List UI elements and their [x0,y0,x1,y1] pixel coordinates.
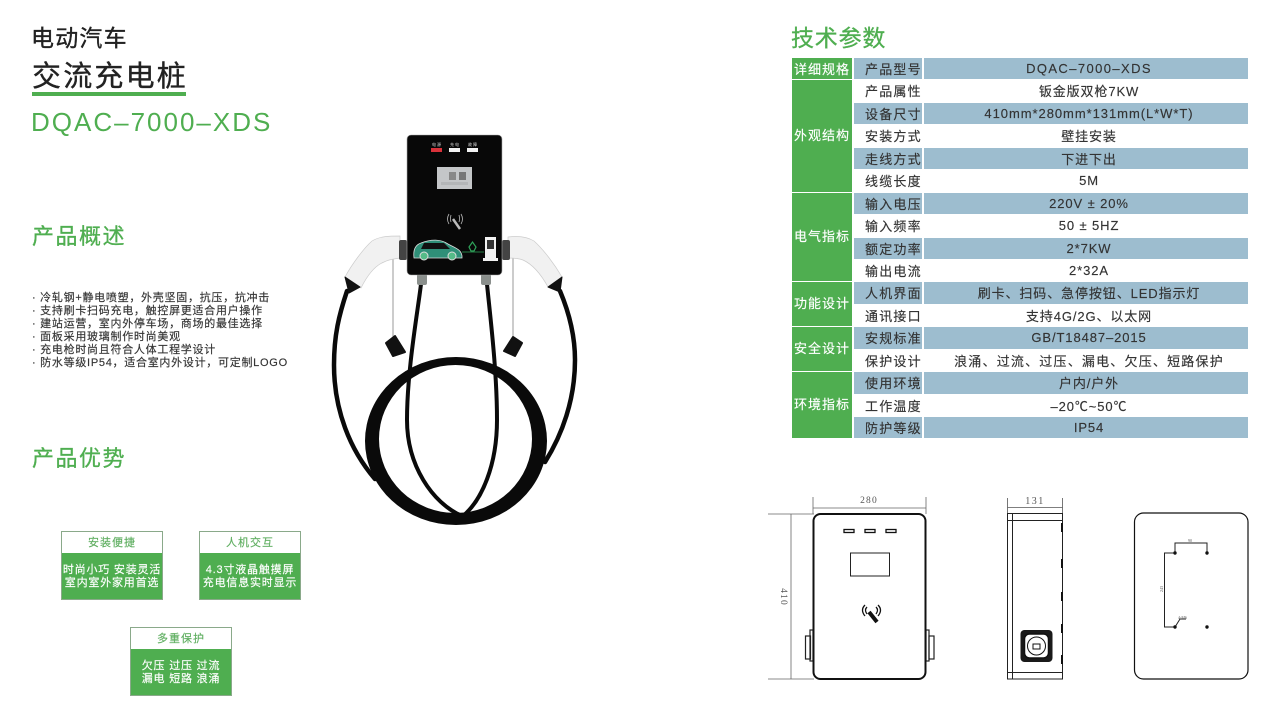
charger body [407,135,502,275]
front view drawing [768,496,935,680]
row: protection [865,354,1224,368]
screen outline [850,553,890,576]
connector socket [1020,630,1052,662]
specification table: 2*7KW [1067,240,1111,256]
row: attribute [865,84,1139,99]
category: function [792,282,852,326]
row: interface [865,308,1152,324]
row: output current [865,262,1109,278]
dimension: 131: 131 [1025,496,1045,507]
category: appearance [792,80,852,192]
charging guns [345,236,562,293]
category: electrical [792,193,852,281]
category: environment: 环境指标 [794,396,850,412]
category: electrical: 电气指标 [794,228,850,244]
car illustration [414,240,462,260]
indicator lights: 故 障 [468,141,477,147]
specification table: 产品属性 [865,84,922,99]
specification table: 壁挂安装 [1061,129,1117,144]
cables [334,284,575,516]
specification table: 使用环境 [865,376,922,391]
specification table: 走线方式 [865,152,922,166]
product overview list: · 冷轧钢+静电喷塑，外壳坚固，抗压，抗冲击 [32,292,270,304]
specification table: DQAC–7000–XDS [1026,60,1152,76]
charging station illustration [483,237,498,261]
specification table: 220V ± 20% [1049,196,1129,210]
specification table: 额定功率 [865,242,922,256]
specification table: 2*32A [1069,262,1109,278]
category: function: 功能设计 [794,296,850,310]
heading: product overview: 产品概述 [32,224,126,249]
specification table: 浪涌、过流、过压、漏电、欠压、短路保护 [954,354,1224,368]
card: human-machine interaction: 充电信息实时显示 [203,577,297,589]
category: environment [792,372,852,438]
row: cable length [865,173,1099,189]
specification table: 输出电流 [865,264,922,278]
card: easy installation: 安装便捷 [88,537,136,549]
specification table: 通讯接口 [865,308,922,324]
row: input voltage [854,193,1248,214]
side outline [1008,514,1062,679]
row: size [854,103,1248,124]
row: HMI [854,282,1248,304]
row: model [854,58,1248,79]
specification table: 安装方式 [865,129,922,144]
specification table: –20℃~50℃ [1051,398,1127,414]
specification table: 输入频率 [865,219,922,234]
specification table: 产品型号 [865,62,922,76]
rear outline [1134,513,1248,679]
specification table: 钣金版双枪7KW [1039,84,1139,99]
specification table: 人机界面 [865,286,922,301]
row: temperature [865,398,1127,414]
specification table: 线缆长度 [865,174,922,189]
product overview list: · 支持刷卡扫码充电，触控屏更适合用户操作 [32,305,263,317]
side brackets [806,630,934,661]
indicator slots [844,530,896,532]
mounting holes [1173,551,1209,629]
dimension: 410: 410 [778,588,788,606]
category: detailed spec: 详细规格 [794,62,850,76]
model name: DQAC–7000–XDS [31,107,272,137]
card: multiple protection: 欠压 过压 过流 [142,660,220,672]
specification table: 50 ± 5HZ [1059,218,1119,233]
title: 交流充电桩 [32,61,188,93]
indicator lights [431,141,478,152]
product overview list [32,292,288,369]
category: safety: 安全设计 [794,340,850,356]
indicator lights: 电 源 [432,141,441,147]
card: multiple protection: 漏电 短路 浪涌 [142,673,220,685]
touch screen [437,167,472,189]
specification table: 设备尺寸 [865,106,922,122]
heading: product advantages: 产品优势 [32,446,126,471]
charger product image [332,134,578,525]
card: easy installation [61,531,163,600]
side view drawing [1007,496,1063,680]
dimension: 280: 280 [860,496,878,506]
small dimension labels [1159,538,1192,620]
specification table: 户内/户外 [1059,376,1119,391]
row: protection grade [854,417,1248,438]
indicator lights: 充 电 [450,141,459,147]
icon: NFC card [448,214,462,229]
row: wiring [854,148,1248,169]
small dimension labels: 4-M6 [1178,615,1187,620]
panel outline [814,514,926,679]
specification table: 保护设计 [865,354,922,368]
row: installation [865,129,1117,144]
product overview list: · 充电枪时尚且符合人体工程学设计 [32,344,216,356]
specification table: 下进下出 [1061,152,1117,166]
specification table: 安规标准 [865,331,922,346]
lanyards and plug caps [386,258,522,356]
icon: recycle [469,242,476,251]
card: easy installation: 室内室外家用首选 [65,577,159,589]
rear view drawing [1134,512,1249,680]
specification table: 工作温度 [865,398,922,414]
card: human-machine interaction: 人机交互 [226,537,274,549]
specification table: 防护等级 [865,420,922,436]
product overview list: · 建站运营，室内外停车场，商场的最佳选择 [32,318,263,330]
cable glands [417,274,491,285]
category: detailed spec [792,58,852,79]
row: environment [854,372,1248,394]
mounting dimensions [1164,543,1207,627]
row: input frequency [865,218,1119,234]
specification table: 5M [1079,173,1099,188]
category: appearance: 外观结构 [794,128,850,142]
specification table: 410mm*280mm*131mm(L*W*T) [984,106,1194,120]
specification table: IP54 [1074,420,1104,434]
row: safety standard [854,327,1248,349]
small dimension labels: 90 [1188,538,1192,543]
category: safety [792,327,852,371]
specification table: GB/T18487–2015 [1031,330,1147,345]
card: human-machine interaction [199,531,301,600]
heading: technical parameters: 技术参数 [791,25,886,51]
subtitle: 电动汽车 [31,25,128,51]
row: rated power [854,238,1248,259]
card: multiple protection: 多重保护 [157,633,205,645]
specification table: 输入电压 [865,196,922,212]
product overview list: · 面板采用玻璃制作时尚美观 [32,331,181,343]
cable coil [365,357,547,525]
card: easy installation: 时尚小巧 安装灵活 [63,564,161,576]
specification table: 刷卡、扫码、急停按钮、LED指示灯 [978,286,1200,301]
product overview list: · 防水等级IP54，适合室内外设计，可定制LOGO [32,357,288,369]
card: multiple protection [130,627,232,696]
specification table: 支持4G/2G、以太网 [1026,308,1152,324]
icon: NFC [862,605,880,622]
small dimension labels: 243 [1159,586,1164,592]
card: human-machine interaction: 4.3寸液晶触摸屏 [206,564,294,576]
